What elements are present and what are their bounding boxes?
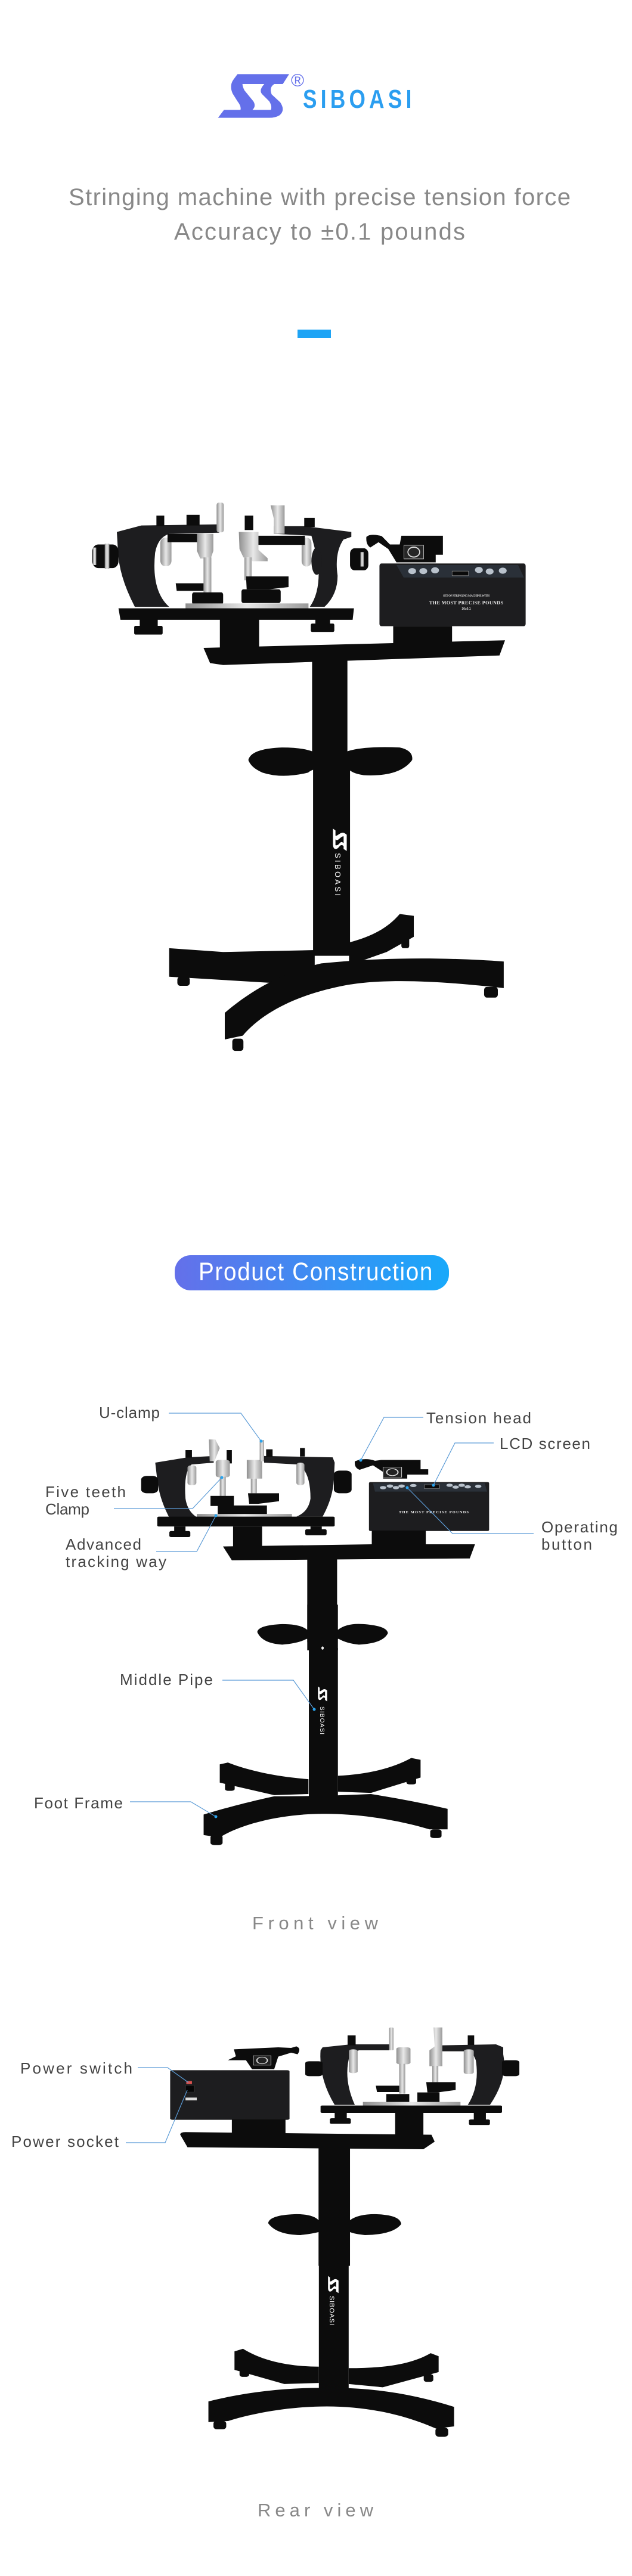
pole brand text: SIBOASI	[328, 2296, 335, 2325]
label line 1: Five teeth	[45, 1483, 126, 1501]
control box headline: THE MOST PRECISE POUNDS	[429, 600, 504, 606]
brand logo	[218, 71, 411, 118]
label: LCD screen	[500, 1435, 590, 1453]
icon: SS mark	[218, 74, 289, 118]
callout: Tension head	[359, 1409, 531, 1461]
pole brand text: SIBOASI	[318, 1706, 325, 1734]
leader line	[114, 1478, 222, 1509]
leader line	[169, 1413, 261, 1441]
label: Middle Pipe	[120, 1671, 213, 1689]
leader line	[222, 1680, 314, 1709]
subtitle line 1: Stringing machine with precise tension force	[69, 184, 571, 210]
hero product photo: stringing machine	[92, 502, 526, 1051]
callout: U-clamp	[99, 1404, 262, 1442]
control box headline: THE MOST PRECISE POUNDS	[399, 1510, 469, 1514]
accent bar	[298, 330, 331, 338]
pole logo mark	[318, 1686, 327, 1702]
label line 2: Clamp	[45, 1500, 89, 1518]
label line 2: tracking way	[66, 1553, 166, 1571]
label: Power switch	[20, 2059, 132, 2077]
callout: Power switch	[20, 2059, 188, 2082]
leader line	[361, 1417, 423, 1460]
callout: Operating button	[405, 1486, 618, 1553]
label: Tension head	[426, 1409, 531, 1427]
label line 1: Advanced	[66, 1535, 141, 1553]
control box value: 10±0.1	[461, 607, 471, 611]
callout: Foot Frame	[34, 1794, 217, 1818]
pole logo mark	[333, 828, 347, 851]
label: Power socket	[11, 2133, 119, 2150]
label: U-clamp	[99, 1404, 160, 1422]
leader line	[138, 2068, 188, 2082]
leader line	[126, 2090, 187, 2143]
leader line	[407, 1488, 534, 1534]
leader line	[433, 1443, 494, 1485]
callout: LCD screen	[432, 1435, 590, 1486]
registered mark: ®	[291, 71, 304, 91]
label line 2: button	[541, 1535, 592, 1553]
caption: rear view: Rear view	[258, 2500, 374, 2521]
callout: Power socket	[11, 2090, 187, 2150]
pole logo mark	[328, 2276, 339, 2293]
heading text: Product Construction	[199, 1257, 432, 1286]
subtitle line 2: Accuracy to ±0.1 pounds	[174, 219, 465, 245]
callout: Advanced tracking way	[66, 1514, 217, 1571]
label line 1: Operating	[541, 1518, 618, 1536]
pill background	[175, 1255, 449, 1290]
brand name: SIBOASI	[303, 85, 411, 114]
label: Foot Frame	[34, 1794, 123, 1812]
pole brand text: SIBOASI	[333, 853, 342, 896]
leader line	[130, 1802, 216, 1817]
rear view machine photo	[170, 2028, 519, 2437]
control box print: SET OF STRINGING MACHINE WITH	[443, 595, 490, 598]
callout: Middle Pipe	[120, 1671, 316, 1711]
leader line	[156, 1516, 216, 1551]
subtitle text	[69, 184, 571, 245]
callout: Five teeth clamp	[45, 1476, 223, 1518]
section heading pill	[175, 1255, 449, 1290]
caption: front view: Front view	[252, 1913, 379, 1933]
front view machine photo	[141, 1439, 489, 1845]
